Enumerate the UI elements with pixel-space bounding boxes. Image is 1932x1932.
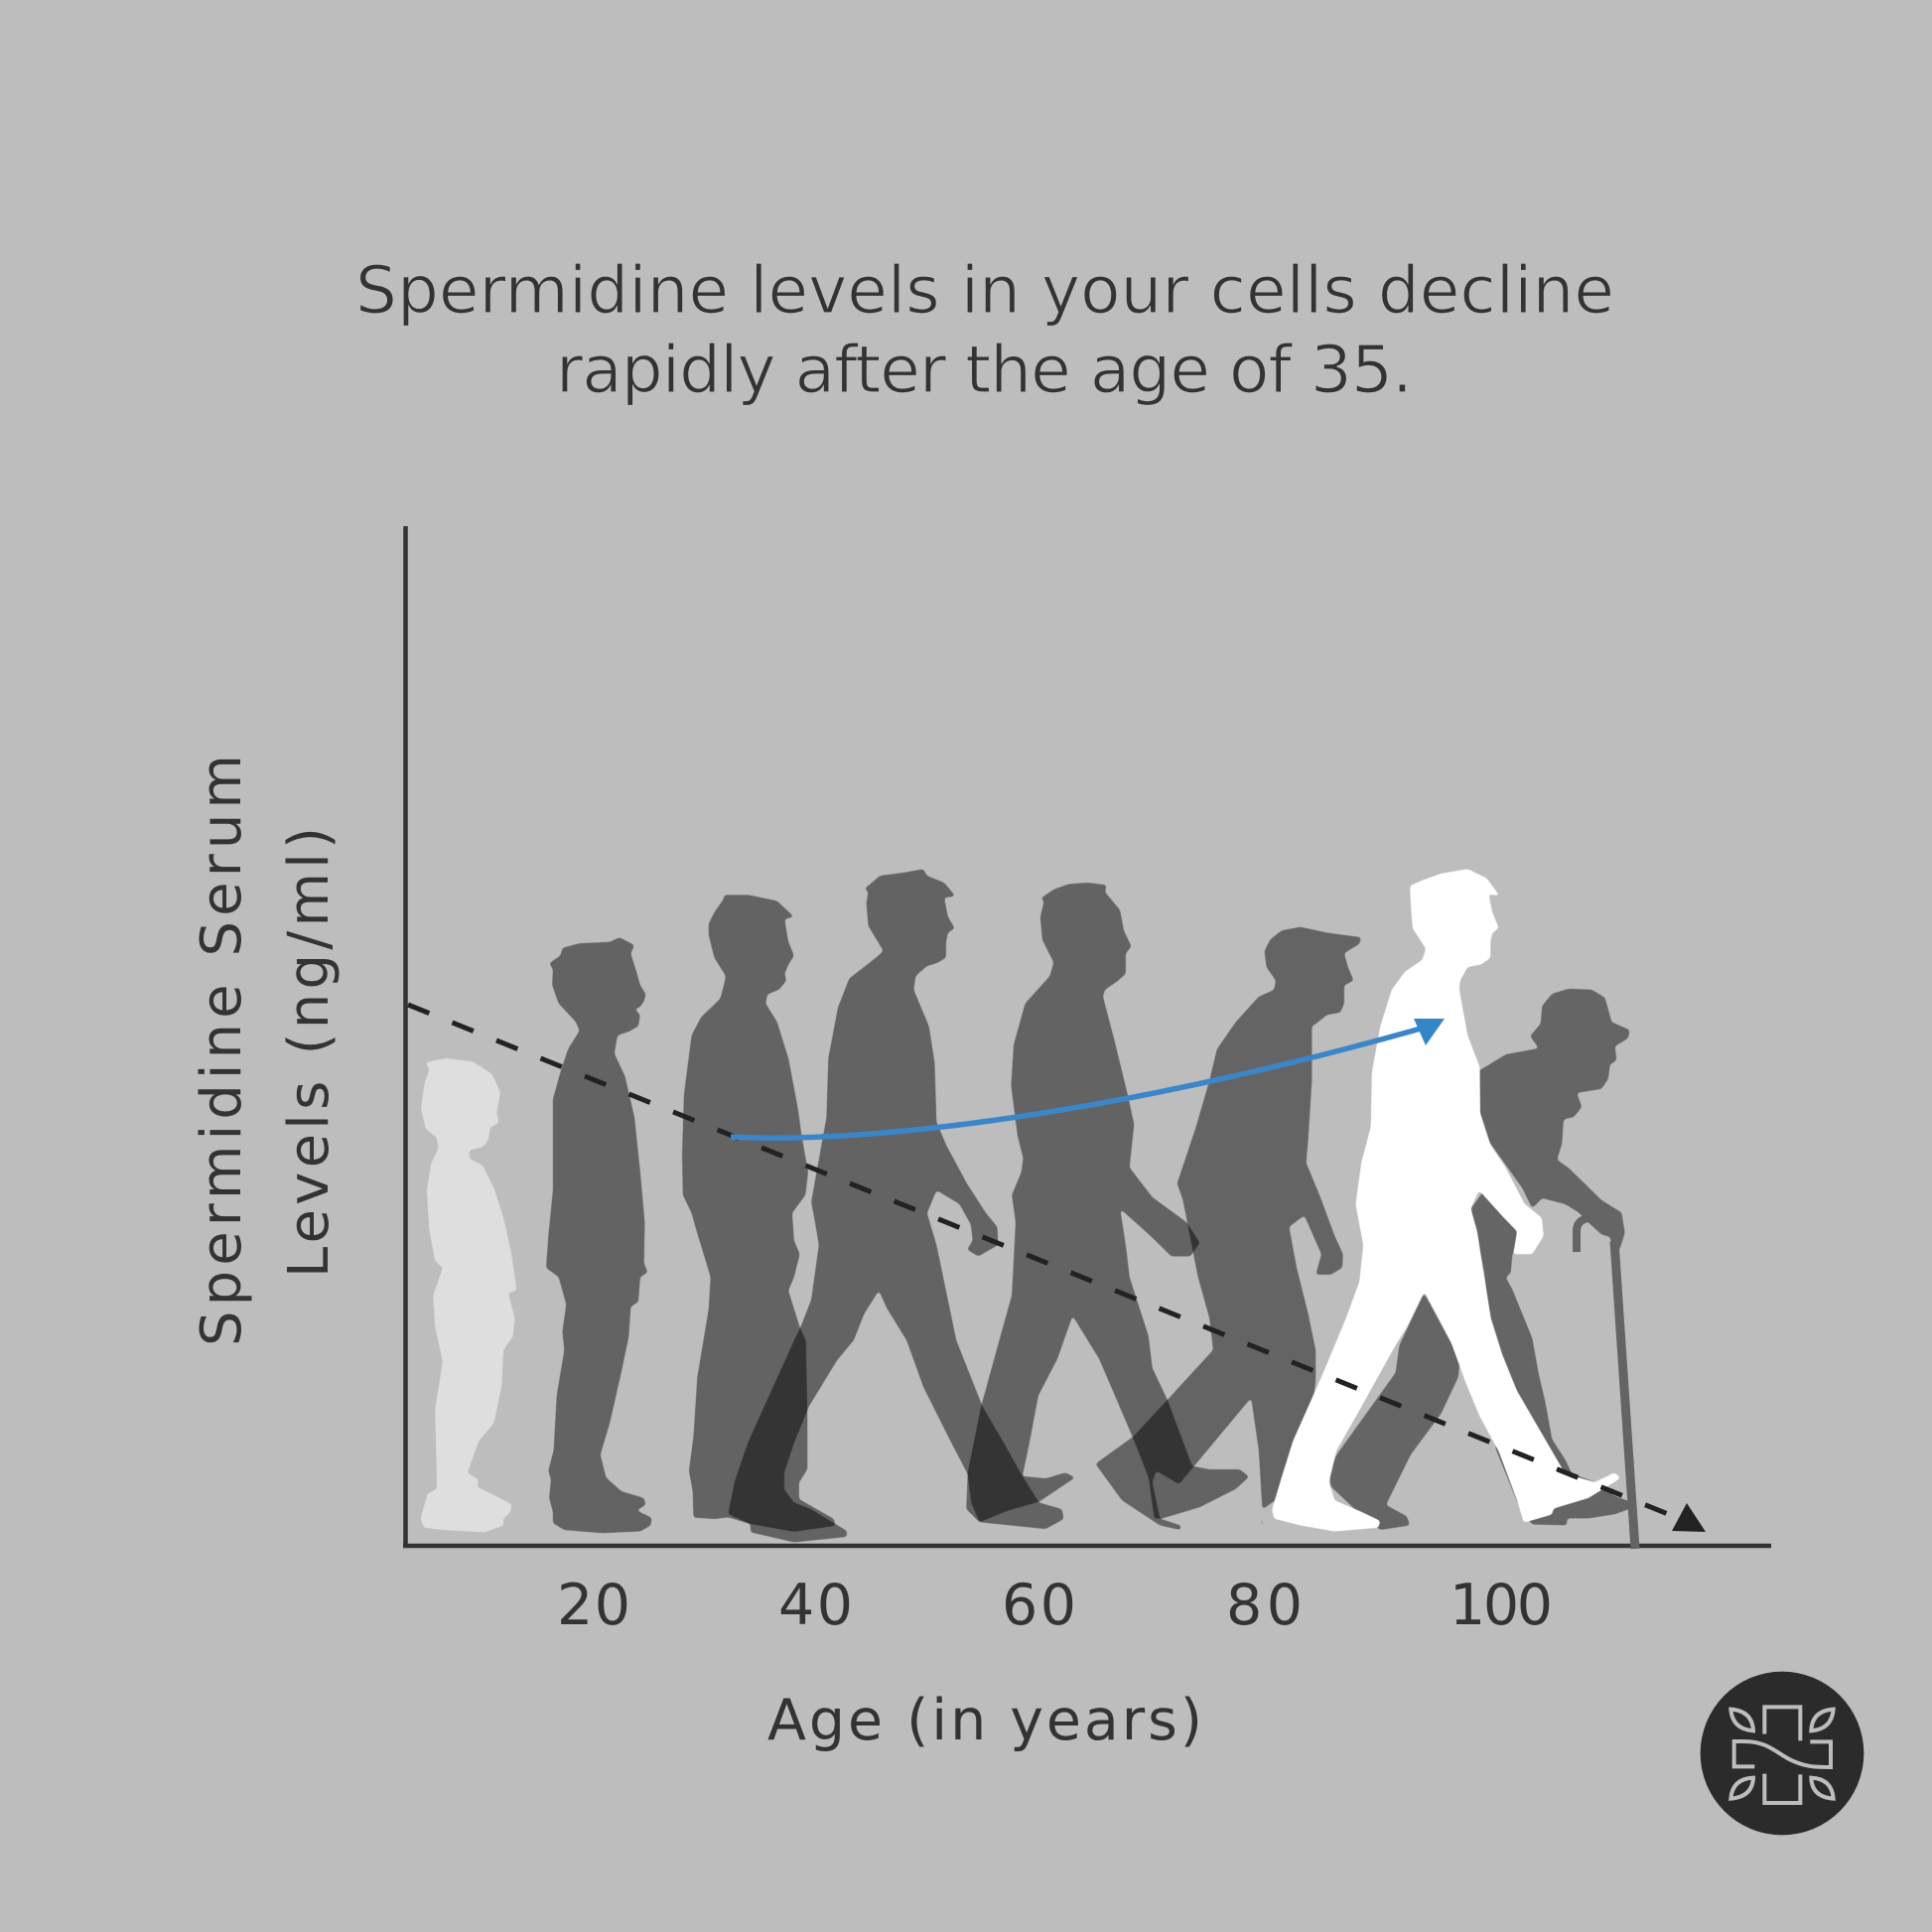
logo badge (1701, 1672, 1863, 1835)
title: rapidly after the age of 35. (556, 332, 1413, 408)
x-axis tick labels: 100 (1449, 1573, 1553, 1638)
silhouette: teenage boy (546, 937, 651, 1533)
x-axis tick labels (557, 1573, 1553, 1638)
x-axis label: Age (in years) (767, 1688, 1202, 1753)
x-axis tick labels: 60 (1002, 1573, 1076, 1638)
silhouette: white highlighted walker (1272, 869, 1621, 1531)
y-axis label (190, 755, 342, 1346)
title: Spermidine levels in your cells decline (355, 252, 1614, 329)
y-axis label: Spermidine Serum (190, 755, 254, 1346)
x-axis tick labels: 80 (1226, 1573, 1303, 1638)
chart axes (403, 526, 1771, 1548)
blue arrow (731, 1019, 1445, 1138)
arrowhead: decline trend (1672, 1503, 1706, 1532)
silhouette: older man with flat cap (1095, 927, 1361, 1530)
silhouette: child (421, 1058, 517, 1532)
silhouette: standing adult (682, 895, 836, 1532)
cane (1577, 1218, 1635, 1549)
silhouettes: child to elderly (421, 869, 1635, 1549)
silhouette: elderly man with cane (1329, 989, 1631, 1530)
x-axis tick labels: 20 (557, 1573, 630, 1638)
y-axis label: Levels (ng/ml) (277, 827, 342, 1278)
silhouette: walking adult one (728, 869, 1075, 1542)
dashed decline trend line (408, 1005, 1706, 1532)
silhouette: walking adult two (966, 883, 1249, 1529)
arrowhead: blue curve (1414, 1019, 1445, 1045)
x-axis tick labels: 40 (778, 1573, 853, 1638)
title (355, 252, 1614, 408)
